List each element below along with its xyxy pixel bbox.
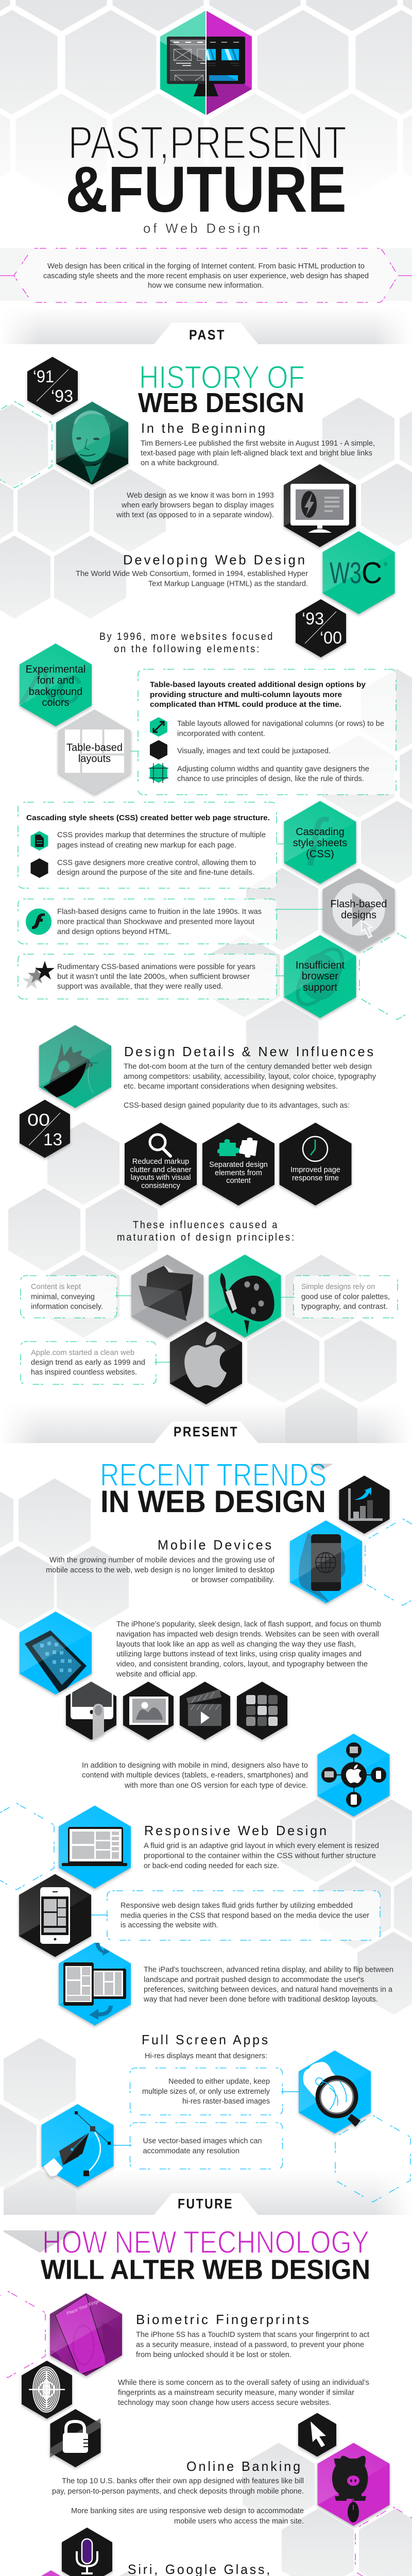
heading: will alter web design: WILL ALTER WEB DESIGN	[41, 2255, 370, 2285]
hexagon: apple	[170, 1321, 242, 1404]
connector	[275, 975, 284, 976]
text: markup: CSS provides markup that determines the structure of multiple	[57, 831, 266, 839]
hexagon: folder	[131, 1255, 203, 1337]
text: mobile devices: With the growing number of mobile devices and the growing use of	[49, 1556, 275, 1564]
hexagon: table-based layouts	[58, 709, 131, 794]
hexagon: experimental font: colors	[42, 697, 70, 708]
text: animations	[57, 962, 255, 991]
panel: media queries: media queries in the CSS that respond based on the media device the user	[121, 1911, 369, 1920]
subheading: biometric fingerprints: Biometric Fingerprints	[136, 2312, 311, 2327]
year badge: 93 to 00: ‘00	[320, 628, 342, 647]
section band: present: PRESENT	[174, 1424, 238, 1439]
hexagon: palette	[209, 1255, 281, 1337]
panel: content kept minimal: information concisely.	[31, 1302, 103, 1311]
icon: app grid	[237, 1682, 287, 1740]
text: safety concern: While there is some concern as to the overall safety of using an individual’s	[118, 2378, 369, 2387]
hexagon: flash-based designs: designs	[341, 910, 376, 921]
text: fluid grid: or back-end coding needed for each size.	[144, 1861, 279, 1870]
text: columns: Table layouts allowed for navigational columns (or rows) to be	[177, 719, 384, 728]
panel: vector images: accommodate any resolution	[143, 2146, 239, 2156]
text: css heading: Cascading style sheets (CSS) created better web page structure.	[26, 814, 270, 822]
year badge: 00 to 13: 13	[43, 1130, 62, 1149]
section band: future	[0, 2170, 412, 2252]
year badge: 91 to 93: ‘93	[51, 386, 73, 405]
text: web design born	[116, 491, 274, 519]
text: multiple devices	[82, 1761, 308, 1790]
text: first website: text-based page with plain left-aligned black text and bright blue links	[141, 449, 372, 457]
hexagon: cascading style sheets: f	[305, 805, 330, 880]
text: rule of thirds: chance to use principles of design, like the rule of thirds.	[177, 774, 364, 783]
background hexagon pattern: full screen	[0, 2038, 76, 2188]
text: W3C: The World Wide Web Consortium, formed in 1994, established Hyper	[76, 569, 308, 578]
panel: content kept minimal: minimal, conveying	[31, 1292, 95, 1301]
text: iPhone popularity: website and official app.	[116, 1670, 197, 1679]
dashed hexagon: right	[355, 2507, 412, 2576]
year badge: 00 to 13	[20, 1099, 70, 1158]
hexagon: insufficient browser support: browser	[302, 971, 338, 982]
panel: simple designs	[294, 1276, 398, 1318]
title: past, present: PAST,PRESENT	[68, 117, 347, 169]
heading: by 1996: By 1996, more websites focused	[99, 631, 274, 642]
icon: fingerprint target	[22, 2361, 72, 2419]
text: advantages: CSS-based design gained popularity due to its advantages, such as:	[124, 1101, 350, 1110]
text: dot-com boom: among competitors: usability, accessibility, layout, color choice, typography	[124, 1072, 376, 1081]
panel: apple.com: Apple.com started a clean web	[31, 1348, 134, 1357]
background hexagon pattern: future	[93, 2443, 412, 2576]
subheading: full screen apps: Full Screen Apps	[142, 2032, 270, 2047]
hexagon: improved response time: response time	[292, 1174, 339, 1182]
text: mobile devices	[46, 1556, 275, 1584]
text: dot-com boom: The dot-com boom at the turn of the century demanded better web design	[124, 1062, 372, 1071]
hexagon: cascading style sheets	[284, 801, 356, 884]
text: safety concern: technology may soon change how users access secure websites.	[118, 2398, 331, 2407]
text: hi-res: Hi-res displays meant that designers:	[145, 2052, 267, 2060]
hexagon: separated design	[202, 1123, 274, 1206]
text: table layouts intro: complicated than HTML could produce at the time.	[150, 700, 341, 709]
text: iPad: landscape and portrait pushed design to accommodate the user's	[144, 1975, 364, 1984]
text: columns: incorporated with content.	[177, 730, 265, 738]
hexagon: reduced markup	[125, 1123, 197, 1206]
intro panel: Web design has been critical in the forging of Internet content. From basic HTML production to	[47, 262, 365, 270]
hexagon: improved response time	[279, 1123, 351, 1206]
subheading: design details: Design Details & New Influences	[124, 1044, 375, 1059]
text: TouchID: The iPhone 5S has a TouchID system that scans your fingerprint to act	[136, 2330, 370, 2339]
text: first website	[141, 439, 375, 467]
heading: by 1996: on the following elements:	[114, 643, 261, 655]
year badge: 93 to 00	[296, 599, 346, 657]
connector	[91, 1914, 108, 1916]
heading: by 1996	[99, 631, 274, 655]
text: dot-com boom: etc. became important considerations when designing websites.	[124, 1082, 338, 1091]
icon: thumb navigation	[66, 1682, 116, 1740]
dashed hexagon: right	[335, 2115, 410, 2202]
hexagon: piggy bank	[317, 2443, 389, 2526]
hexagon: iPhone photo	[20, 1612, 92, 1695]
text: online banking	[52, 2477, 304, 2526]
subheading: responsive web design: Responsive Web Design	[144, 1823, 329, 1838]
panel: raster images: hi-res raster-based images	[182, 2097, 270, 2106]
text: multiple devices: In addition to designing with mobile in mind, designers also have to	[82, 1761, 308, 1770]
hexagon: table-based layouts: Table-based	[66, 742, 123, 753]
heading: web design: WEB DESIGN	[138, 387, 304, 418]
text: flash: more practical than Shockwave and presented more layout	[57, 917, 255, 926]
panel: apple.com: design trend as early as 1999 and	[31, 1358, 145, 1367]
icon: W3C hexagon: C	[362, 556, 382, 590]
icon: stars	[23, 961, 55, 989]
section band: past: PAST	[189, 327, 226, 343]
hexagon: experimental font: font and	[37, 675, 74, 686]
text: safety concern: fingerprints as a mainstream security measure, many wonder if similar	[118, 2388, 354, 2397]
text: flash	[57, 907, 262, 936]
panel: simple designs: good use of color palettes,	[301, 1292, 390, 1301]
hexagon: insufficient browser support: support	[303, 982, 337, 993]
text: iPad: way that had never been done before with traditional desktop layouts.	[143, 1995, 378, 2004]
photo: Tim Berners-Lee	[56, 401, 128, 485]
text: fluid grid	[144, 1841, 379, 1870]
panel: media queries: is accessing the website with.	[121, 1921, 218, 1929]
text: W3C	[76, 569, 308, 588]
text: iPhone popularity	[116, 1620, 381, 1679]
text: safety concern	[118, 2378, 369, 2407]
year badge: 91 to 93: ‘91	[33, 367, 54, 386]
hexagon: reduced markup: Reduced markup	[132, 1158, 189, 1166]
text: fluid grid: A fluid grid is an adaptive grid layout in which every element is resized	[144, 1841, 379, 1850]
text: mobile devices: mobile access to the web, web design is no longer limited to desktop	[46, 1566, 274, 1574]
text: W3C: Text Markup Language (HTML) as the standard.	[148, 579, 308, 588]
hexagon: separated design: elements from	[215, 1169, 262, 1177]
text: web design born: when early browsers began to display images	[121, 501, 274, 510]
subheading: in the beginning: In the Beginning	[141, 420, 267, 436]
hexagon: insufficient browser support: Insufficient	[296, 960, 345, 971]
dashed hexagon: left	[0, 1803, 54, 1890]
connector	[154, 1362, 170, 1363]
hexagon: experimental font	[19, 643, 92, 726]
background hexagon pattern: past	[0, 398, 412, 1403]
photo: Google Glass	[41, 2570, 61, 2576]
connector	[281, 1297, 295, 1298]
dashed hexagon: right	[365, 1519, 412, 1605]
logo: monitor split hexagon	[160, 10, 252, 115]
dashed hexagon: left	[0, 401, 52, 488]
text: flash: and design options beyond HTML.	[57, 927, 171, 936]
text: first website: on a white background.	[141, 459, 219, 467]
year badge: 93 to 00: ‘93	[302, 609, 324, 628]
connector	[113, 2145, 131, 2146]
background hexagon pattern: present	[0, 1479, 412, 2014]
text: multiple devices: with more than one OS version for each type of device.	[124, 1781, 308, 1790]
hexagon: multiple devices	[317, 1734, 389, 1817]
text: creative control: design around the purpose of the site and fine-tune details.	[57, 868, 254, 877]
subheading: developing web design: Developing Web Design	[123, 552, 307, 568]
intro panel: how we consume new information.	[148, 281, 264, 290]
text: TouchID: as a security measure, instead of a password, to prevent your phone	[136, 2340, 364, 2349]
text: TouchID: from being unlocked should it be lost or stolen.	[136, 2350, 291, 2359]
year badge: 91 to 93	[27, 357, 78, 415]
hexagon: flash-based designs	[322, 869, 394, 951]
heading: maturation of design principles: These influences caused a	[133, 1219, 279, 1231]
hexagon: mobile phone in hand	[290, 1520, 362, 1603]
hexagon: reduced markup: clutter and cleaner	[130, 1166, 192, 1174]
icon: video clapper	[180, 1682, 230, 1740]
connector	[131, 751, 139, 752]
hexagon: vector pen tool	[41, 2104, 113, 2187]
hexagon: separated design: content	[226, 1177, 251, 1185]
heading: maturation of design principles: maturation of design principles:	[117, 1232, 296, 1243]
hexagon: reduced markup: consistency	[141, 1182, 181, 1190]
icon: black hexagon	[31, 858, 48, 878]
hexagon: cascading style sheets: Cascading	[296, 826, 345, 838]
background hexagon pattern: header	[0, 0, 412, 198]
text: images and text: Visually, images and text could be juxtaposed.	[177, 747, 331, 755]
year badge: 00 to 13: 00	[27, 1110, 50, 1129]
hexagon: phone layout	[19, 1874, 91, 1957]
text: animations: support was available, that they were really used.	[57, 982, 223, 991]
text: table layouts intro: Table-based layouts created additional design options by	[150, 680, 366, 689]
text: iPad: preferences, switching between devices, and natural hand movements in a	[144, 1985, 393, 1994]
hexagon: insufficient browser support	[284, 935, 356, 1018]
text: iPhone popularity: video, and consistent branding, colors, layout, and typography between the	[116, 1660, 368, 1668]
text: iPhone popularity: The iPhone’s popularity, sleek design, lack of flash support, and focus on thumb	[116, 1620, 381, 1629]
panel: raster images: Needed to either update, keep	[168, 2077, 270, 2086]
text: iPhone popularity: layouts that look like an app as well as changing the way they use flash,	[116, 1640, 356, 1649]
text: creative control: CSS gave designers more creative control, allowing them to	[57, 858, 256, 867]
text: fluid grid: proportional to the container within the CSS without further structure	[144, 1852, 376, 1860]
icon: arrows	[150, 717, 167, 737]
panel: apple.com	[21, 1342, 156, 1384]
text: table layouts intro: providing structure and multi-column layouts more	[150, 690, 342, 699]
heading: in web design: IN WEB DESIGN	[100, 1484, 326, 1519]
text: rule of thirds	[177, 765, 369, 783]
panel: simple designs: Simple designs rely on	[301, 1282, 375, 1291]
icon: crisp image	[123, 1682, 174, 1740]
hexagon: cascading style sheets: (CSS)	[306, 849, 334, 860]
panel: raster images: multiple sizes of, or only use extremely	[142, 2087, 270, 2096]
dashed hexagon: left	[0, 2291, 45, 2378]
panel: media queries	[107, 1891, 380, 1940]
photo: fingerprint on iPhone	[50, 2293, 122, 2378]
text: table layouts intro	[150, 680, 366, 709]
text: creative control	[57, 858, 256, 877]
dashed hexagon: right	[359, 933, 412, 1020]
icon: document	[31, 831, 48, 851]
panel: css	[18, 802, 277, 888]
text: columns	[177, 719, 384, 738]
icon: microphone	[62, 2528, 112, 2576]
hexagon: experimental font: Experimental	[26, 664, 85, 675]
connector	[275, 909, 323, 910]
panel: flash	[18, 899, 277, 944]
panel: apple.com: has inspired countless websites.	[31, 1368, 137, 1377]
section band: present	[0, 1388, 412, 1470]
hexagon: separated design: Separated design	[209, 1161, 268, 1169]
connector	[281, 2091, 299, 2092]
text: mobile devices: or browser compatibility.	[192, 1575, 274, 1584]
text: multiple devices: contend with multiple devices (tablets, e-readers, smartphones) and	[82, 1771, 308, 1780]
section band: future: FUTURE	[178, 2196, 233, 2211]
text: online banking: The top 10 U.S. banks offer their own app designed with features like bill	[62, 2477, 304, 2485]
intro panel	[0, 248, 412, 302]
title: and future: &FUTURE	[65, 153, 347, 226]
subheading: online banking: Online Banking	[186, 2459, 302, 2474]
panel: raster images	[130, 2068, 282, 2115]
hexagon: laptop	[59, 1805, 131, 1889]
icon: padlock	[50, 2409, 101, 2467]
subtitle: of Web Design	[143, 221, 263, 236]
section band: past	[0, 307, 412, 344]
icon: grid	[149, 763, 168, 783]
panel: media queries: Responsive web design takes fluid grids further by utilizing embedded	[121, 1901, 353, 1910]
icon: W3C hexagon	[322, 531, 394, 614]
subheading: mobile devices: Mobile Devices	[158, 1537, 273, 1553]
icon: growth chart	[339, 1476, 389, 1534]
text: web design born: with text (as opposed to in a separate window).	[116, 511, 274, 519]
panel: simple designs: typography, and contrast.	[301, 1302, 388, 1311]
panel: vector images: Use vector-based images which can	[143, 2137, 262, 2145]
panel: vector images	[130, 2123, 282, 2169]
text: markup	[57, 831, 266, 850]
hexagon: rotating tablet	[59, 1942, 131, 2026]
connector	[277, 843, 284, 844]
text: first website: Tim Berners-Lee published the first website in August 1991 - A simple,	[141, 439, 375, 448]
hexagon: table-based layouts: layouts	[78, 753, 111, 765]
text: dot-com boom	[124, 1062, 376, 1091]
text: online banking: mobile users who access the main site.	[174, 2517, 304, 2526]
icon: cursor	[298, 2413, 336, 2456]
text: iPad: The iPad's touchscreen, advanced retina display, and ability to flip between	[144, 1965, 393, 1974]
text: flash: Flash-based designs came to fruition in the late 1990s. It was	[57, 907, 262, 916]
icon: flash logo	[26, 909, 52, 935]
intro panel: cascading style sheets and the more recent emphasis on user experience, web design has shaped	[43, 272, 369, 280]
hexagon: cascading style sheets: style sheets	[293, 838, 347, 849]
heading: maturation of design principles	[117, 1219, 296, 1243]
hexagon: reduced markup: layouts with visual	[131, 1174, 191, 1182]
text: iPhone popularity: navigation has impacted web design trends. Websites can be seen with overall	[116, 1630, 379, 1638]
panel: animations	[18, 954, 277, 999]
panel: table layouts	[138, 669, 396, 794]
text: animations: Rudimentary CSS-based animations were possible for years	[57, 962, 255, 971]
connector	[115, 1295, 131, 1296]
text: markup: pages instead of creating new markup for each page.	[57, 841, 236, 850]
heading: recent trends: RECENT TRENDS	[100, 1458, 327, 1493]
icon: W3C hexagon: W3	[330, 556, 362, 590]
text: iPad	[143, 1965, 393, 2004]
photo: hand gesture	[39, 1025, 111, 1108]
icon: black hexagon	[150, 740, 167, 759]
text: TouchID	[136, 2330, 370, 2359]
hexagon: experimental font: background	[29, 686, 82, 698]
text: online banking: pay, person-to-person payments, and check deposits through mobile phone.	[52, 2487, 304, 2496]
text: web design born: Web design as we know it was born in 1993	[127, 491, 274, 500]
text: online banking: More banking sites are using responsive web design to accommodate	[71, 2506, 304, 2515]
panel: content kept minimal	[21, 1276, 117, 1318]
hexagon: improved response time: Improved page	[290, 1166, 340, 1174]
heading: history of: HISTORY OF	[139, 360, 305, 396]
text: rule of thirds: Adjusting column widths and quantity gave designers the	[177, 765, 369, 773]
text: animations: but it wasn’t until the late 2000s, when sufficient browser	[57, 972, 250, 981]
hexagon: flash-based designs: Flash-based	[330, 899, 387, 910]
icon: W3C hexagon: ®	[384, 562, 388, 567]
photo: fingerprint on iPhone: Place Your Finger	[66, 2297, 102, 2316]
panel: content kept minimal: Content is kept	[31, 1282, 81, 1291]
text: iPhone popularity: utilizing large buttons instead of text links, using crisp quality images and	[116, 1650, 362, 1658]
icon: early browser monitor	[284, 464, 356, 547]
hexagon: rose with magnifier	[299, 2050, 371, 2133]
hexagon: experimental font: Ac	[19, 657, 82, 715]
